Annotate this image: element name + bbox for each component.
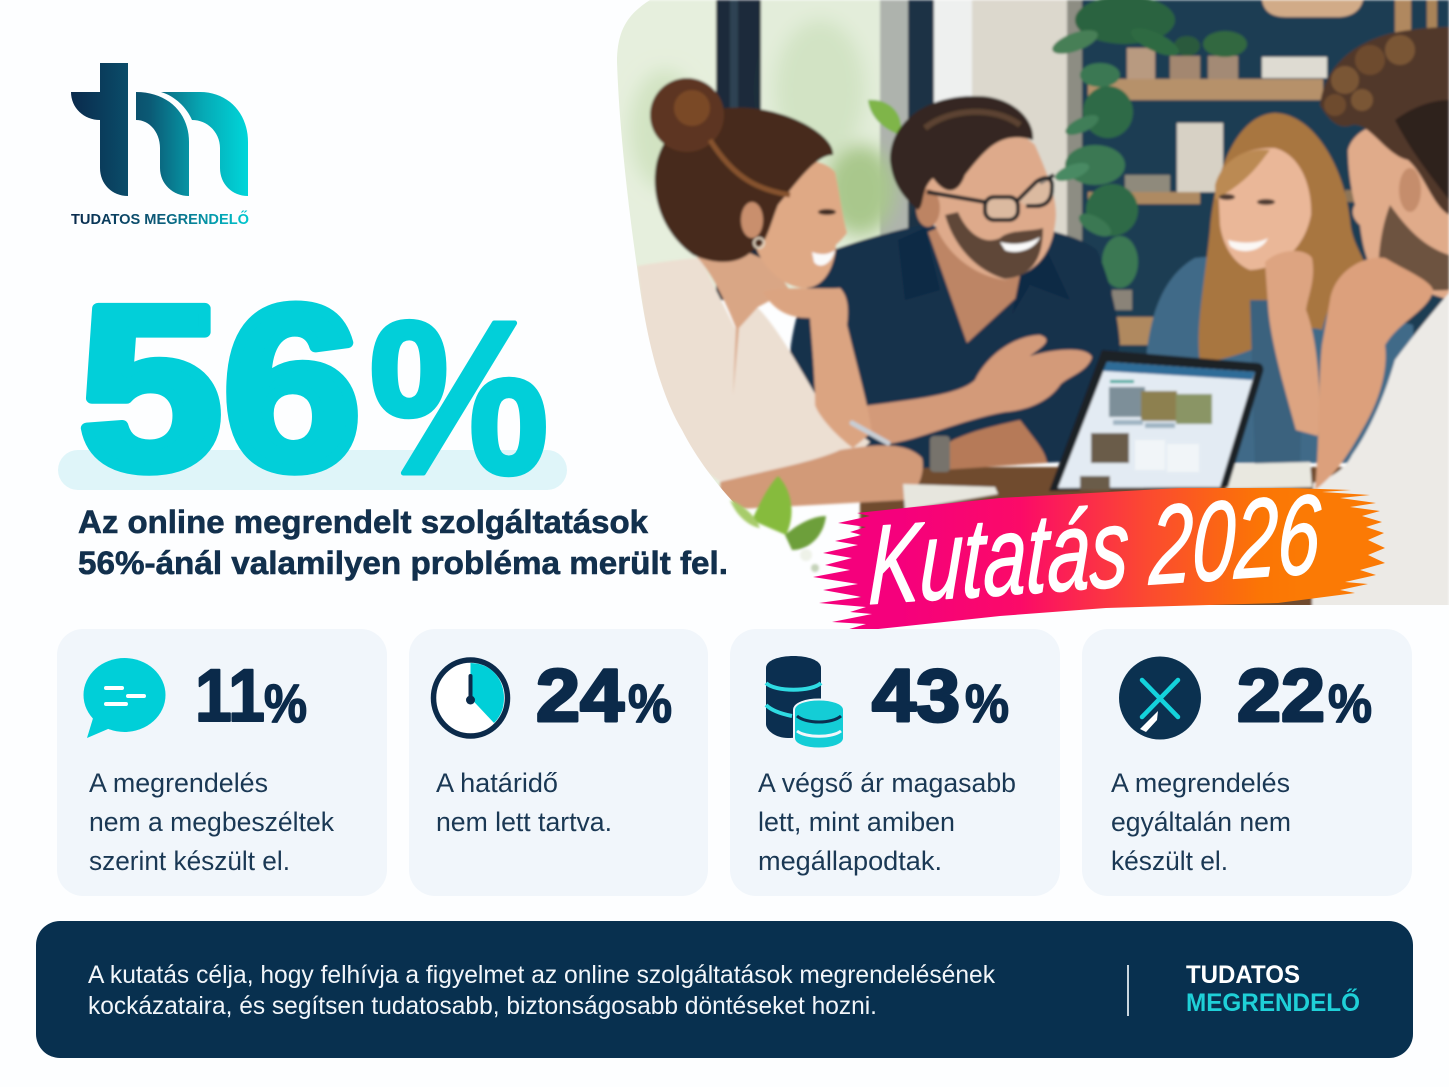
icon: cross with pen in circle [1119,656,1201,740]
brush banner: Kutatás 2026 [813,470,1385,632]
gesturing forearm and hand [862,335,1092,444]
person: woman with long hair in denim [1147,113,1414,470]
card description: nem a megbeszéltek [89,807,335,837]
stat value 43% [872,654,1009,737]
card description: megállapodtak. [758,846,942,876]
stat value 22%: 22 [1237,654,1325,737]
card description [89,768,335,876]
headline statement: Az online megrendelt szolgáltatások [78,504,648,540]
card description: készült el. [1111,846,1228,876]
hanging plant [1049,0,1182,310]
stat value 11%: % [264,674,307,734]
stat card 4: 22% [1082,629,1412,896]
footer brand wordmark: TUDATOS [1186,961,1300,989]
stat value 11% [195,654,307,737]
woman's fist and forearm [1265,251,1320,436]
card description [758,768,1016,876]
icon: database stacks [766,656,844,748]
stat value 24% [536,654,672,737]
table [858,465,1344,605]
stat value 43%: % [965,674,1009,734]
card description: A végső ár magasabb [758,768,1016,798]
person: man at right edge [1312,27,1449,610]
headline statement [78,504,728,581]
stat value 24%: % [628,674,672,734]
big statistic 56%: 5 [79,259,222,518]
card description: A megrendelés [89,768,268,798]
card description: szerint készült el. [89,846,290,876]
notebook on table [903,484,998,510]
card description: nem lett tartva. [436,807,612,837]
laptop showing website [1049,350,1263,491]
decorative leaves in front of the photo edge [730,476,826,572]
person: man with glasses [790,96,1120,472]
card description [1111,768,1291,876]
stat value 22% [1237,654,1372,737]
icon: speech bubble [84,658,166,738]
notebook right of laptop [1226,462,1312,489]
footer panel [36,921,1413,1058]
person: woman with hair bun [637,78,923,510]
card description: A megrendelés [1111,768,1290,798]
card description: A határidő [436,768,558,798]
card description: lett, mint amiben [758,807,955,837]
stat card 1: 11% [57,629,387,896]
big statistic 56% [79,259,549,520]
card description [436,768,612,837]
footer purpose text [88,961,995,1020]
man's hand under chin and forearm [1315,258,1433,490]
logo: TM mark with wordmark [71,63,249,228]
stat value 43%: 43 [872,654,960,737]
stat value 11%: 11 [195,654,265,737]
brush stroke [813,488,1385,632]
logo mark [71,63,128,196]
woman's arm resting chin [763,288,872,448]
footer brand wordmark [1186,961,1360,1017]
footer purpose text: A kutatás célja, hogy felhívja a figyelmet az online szolgáltatások megrendelésének [88,961,995,989]
stat card 3: 43% [730,629,1060,896]
stat value 24%: 24 [536,654,624,737]
pen in hand [852,423,888,443]
icon: clock [434,660,508,736]
big statistic 56%: % [369,277,549,520]
shelves with pots and books [1088,31,1365,345]
card description: egyáltalán nem [1111,807,1291,837]
footer purpose text: kockázataira, és segítsen tudatosabb, biztonságosabb döntéseket hozni. [88,992,877,1020]
photo: team discussing around a laptop [610,0,1449,610]
headline statement: 56%-ánál valamilyen probléma merült fel. [78,545,728,581]
pendant lamp and wooden posts [1260,0,1440,34]
footer brand wordmark: MEGRENDELŐ [1186,988,1360,1017]
stat value 22%: % [1328,674,1372,734]
white shirt [1312,293,1449,610]
logo wordmark: TUDATOS MEGRENDELŐ [71,210,249,228]
window-side plant leaf [868,100,901,135]
stat card 2: 24% [409,629,708,896]
big statistic 56%: 6 [223,259,361,518]
photo background: window and wall [617,0,1449,487]
highlight bar behind big number [58,450,567,490]
